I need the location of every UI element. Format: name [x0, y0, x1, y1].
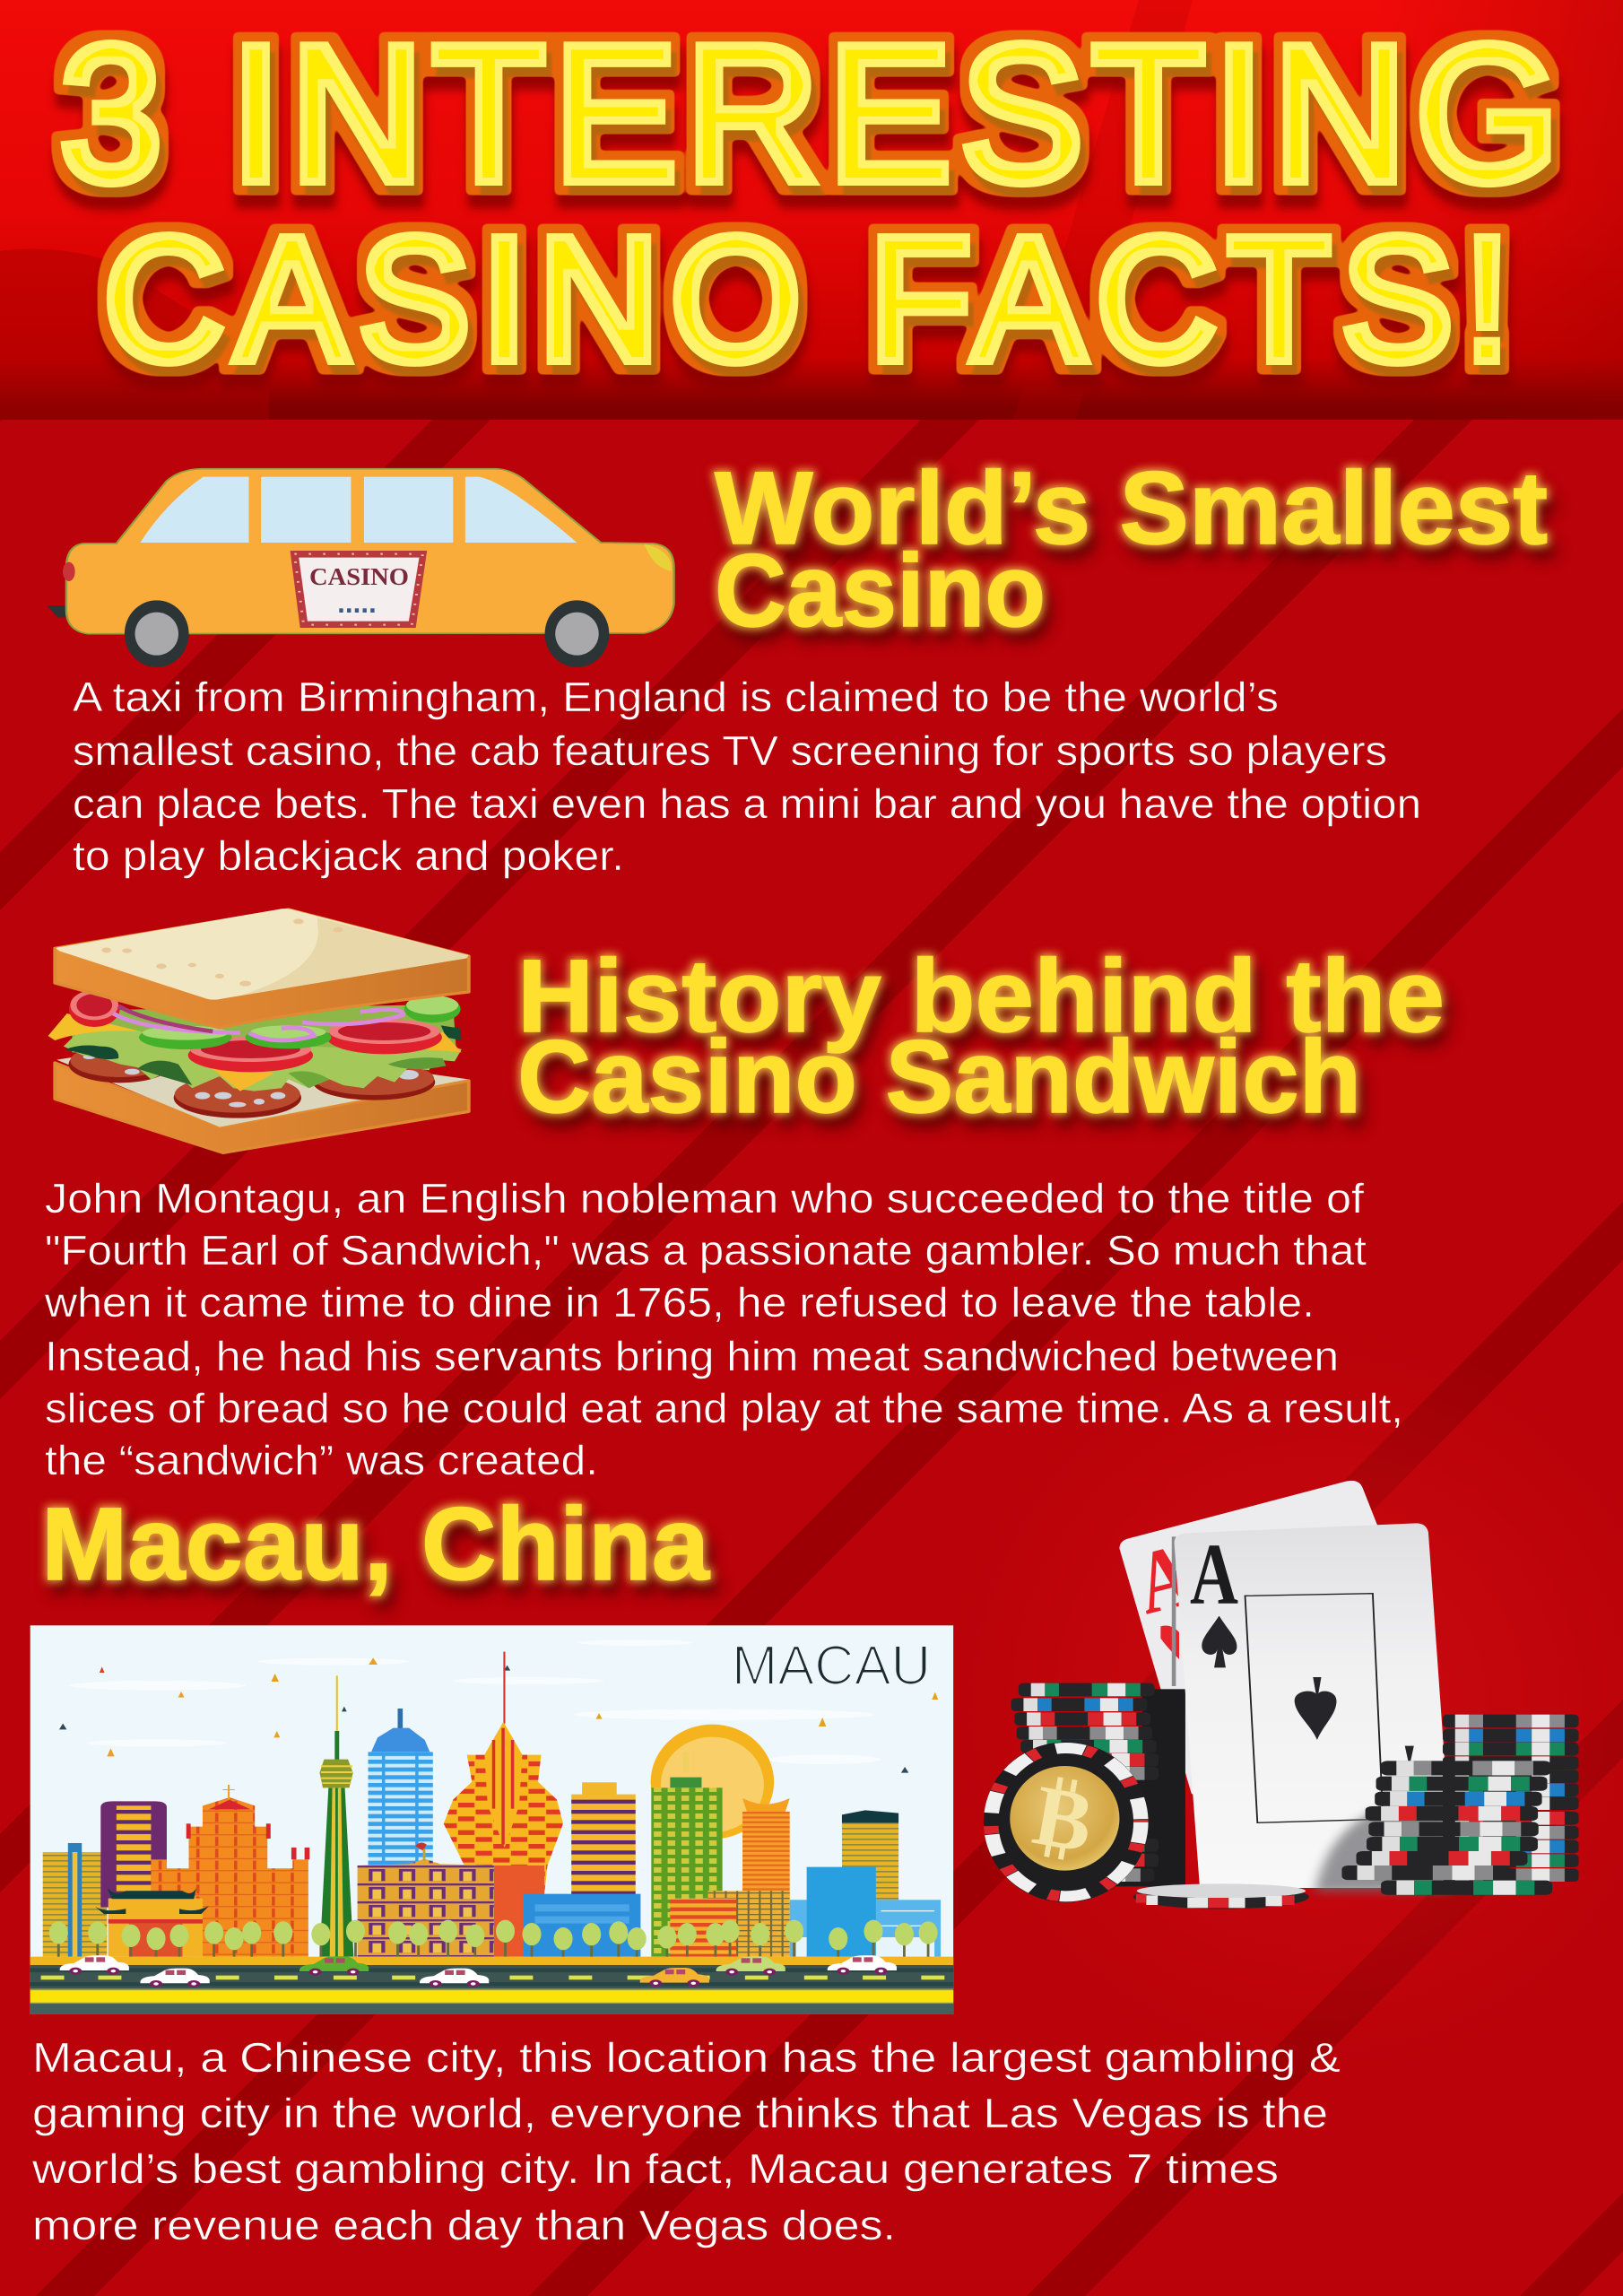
text block: taxi casino: smallest casino, the cab features TV screening for sports so players	[73, 727, 1387, 774]
back card	[1119, 1481, 1383, 1796]
soft glow behind cards	[942, 1327, 1623, 2081]
section 1: world's smallest casino	[47, 451, 1548, 879]
text block: macau: gaming city in the world, everyone thinks that Las Vegas is the	[32, 2090, 1328, 2136]
heading: history behind the casino sandwich: History behind the	[517, 939, 1445, 1054]
text block: macau: more revenue each day than Vegas does.	[32, 2202, 896, 2248]
icon: casino taxi	[47, 469, 674, 667]
heading: world's smallest casino: Casino	[715, 534, 1046, 648]
text block: john montagu: "Fourth Earl of Sandwich," was a passionate gambler. So much that	[45, 1227, 1367, 1274]
text block: john montagu: slices of bread so he could eat and play at the same time. As a result,	[45, 1385, 1403, 1431]
text block: taxi casino	[73, 674, 1421, 879]
illustration: macau skyline: MACAU	[732, 1635, 931, 1697]
text block: macau: Macau, a Chinese city, this location has the largest gambling &	[32, 2034, 1341, 2081]
heading: history behind the casino sandwich	[517, 939, 1445, 1135]
text block: john montagu: John Montagu, an English nobleman who succeeded to the title of	[45, 1175, 1364, 1222]
heading: world's smallest casino	[715, 451, 1548, 648]
title	[59, 4, 1559, 397]
bitcoin chip	[984, 1742, 1149, 1902]
flat chip	[1133, 1885, 1309, 1909]
text block: taxi casino: can place bets. The taxi even has a mini bar and you have the option	[73, 780, 1421, 827]
card A: A	[1190, 1526, 1238, 1623]
heading: macau, china: Macau, China	[41, 1487, 710, 1602]
text block: john montagu: the “sandwich” was created.	[45, 1437, 598, 1483]
text block: taxi casino: A taxi from Birmingham, England is claimed to be the world’s	[73, 674, 1279, 720]
text block: john montagu: Instead, he had his servants bring him meat sandwiched between	[45, 1333, 1339, 1379]
illustration: playing cards and chips	[984, 1481, 1579, 1909]
heading: history behind the casino sandwich: Casino Sandwich	[517, 1020, 1361, 1135]
section 2: history of the sandwich	[44, 909, 1445, 1483]
text block: john montagu: when it came time to dine in 1765, he refused to leave the table.	[44, 1279, 1315, 1326]
illustration: playing cards and chips: A	[1126, 1524, 1203, 1633]
title: 3 INTERESTING	[59, 4, 1559, 222]
illustration: macau skyline	[30, 1625, 953, 2014]
text block: macau	[31, 2034, 1341, 2248]
front card	[1175, 1523, 1451, 1888]
header banner	[0, 0, 1623, 420]
heading: world's smallest casino: World’s Smallest	[715, 451, 1548, 566]
section 3: macau	[30, 1481, 1579, 2248]
text block: macau: world’s best gambling city. In fact, Macau generates 7 times	[31, 2145, 1279, 2192]
title: CASINO FACTS!	[103, 200, 1511, 397]
bitcoin symbol: B	[1027, 1766, 1100, 1871]
text block: taxi casino: to play blackjack and poker.	[73, 832, 624, 879]
icon: casino taxi: CASINO	[309, 563, 409, 590]
text block: john montagu	[44, 1175, 1403, 1483]
icon: sandwich	[48, 909, 469, 1152]
